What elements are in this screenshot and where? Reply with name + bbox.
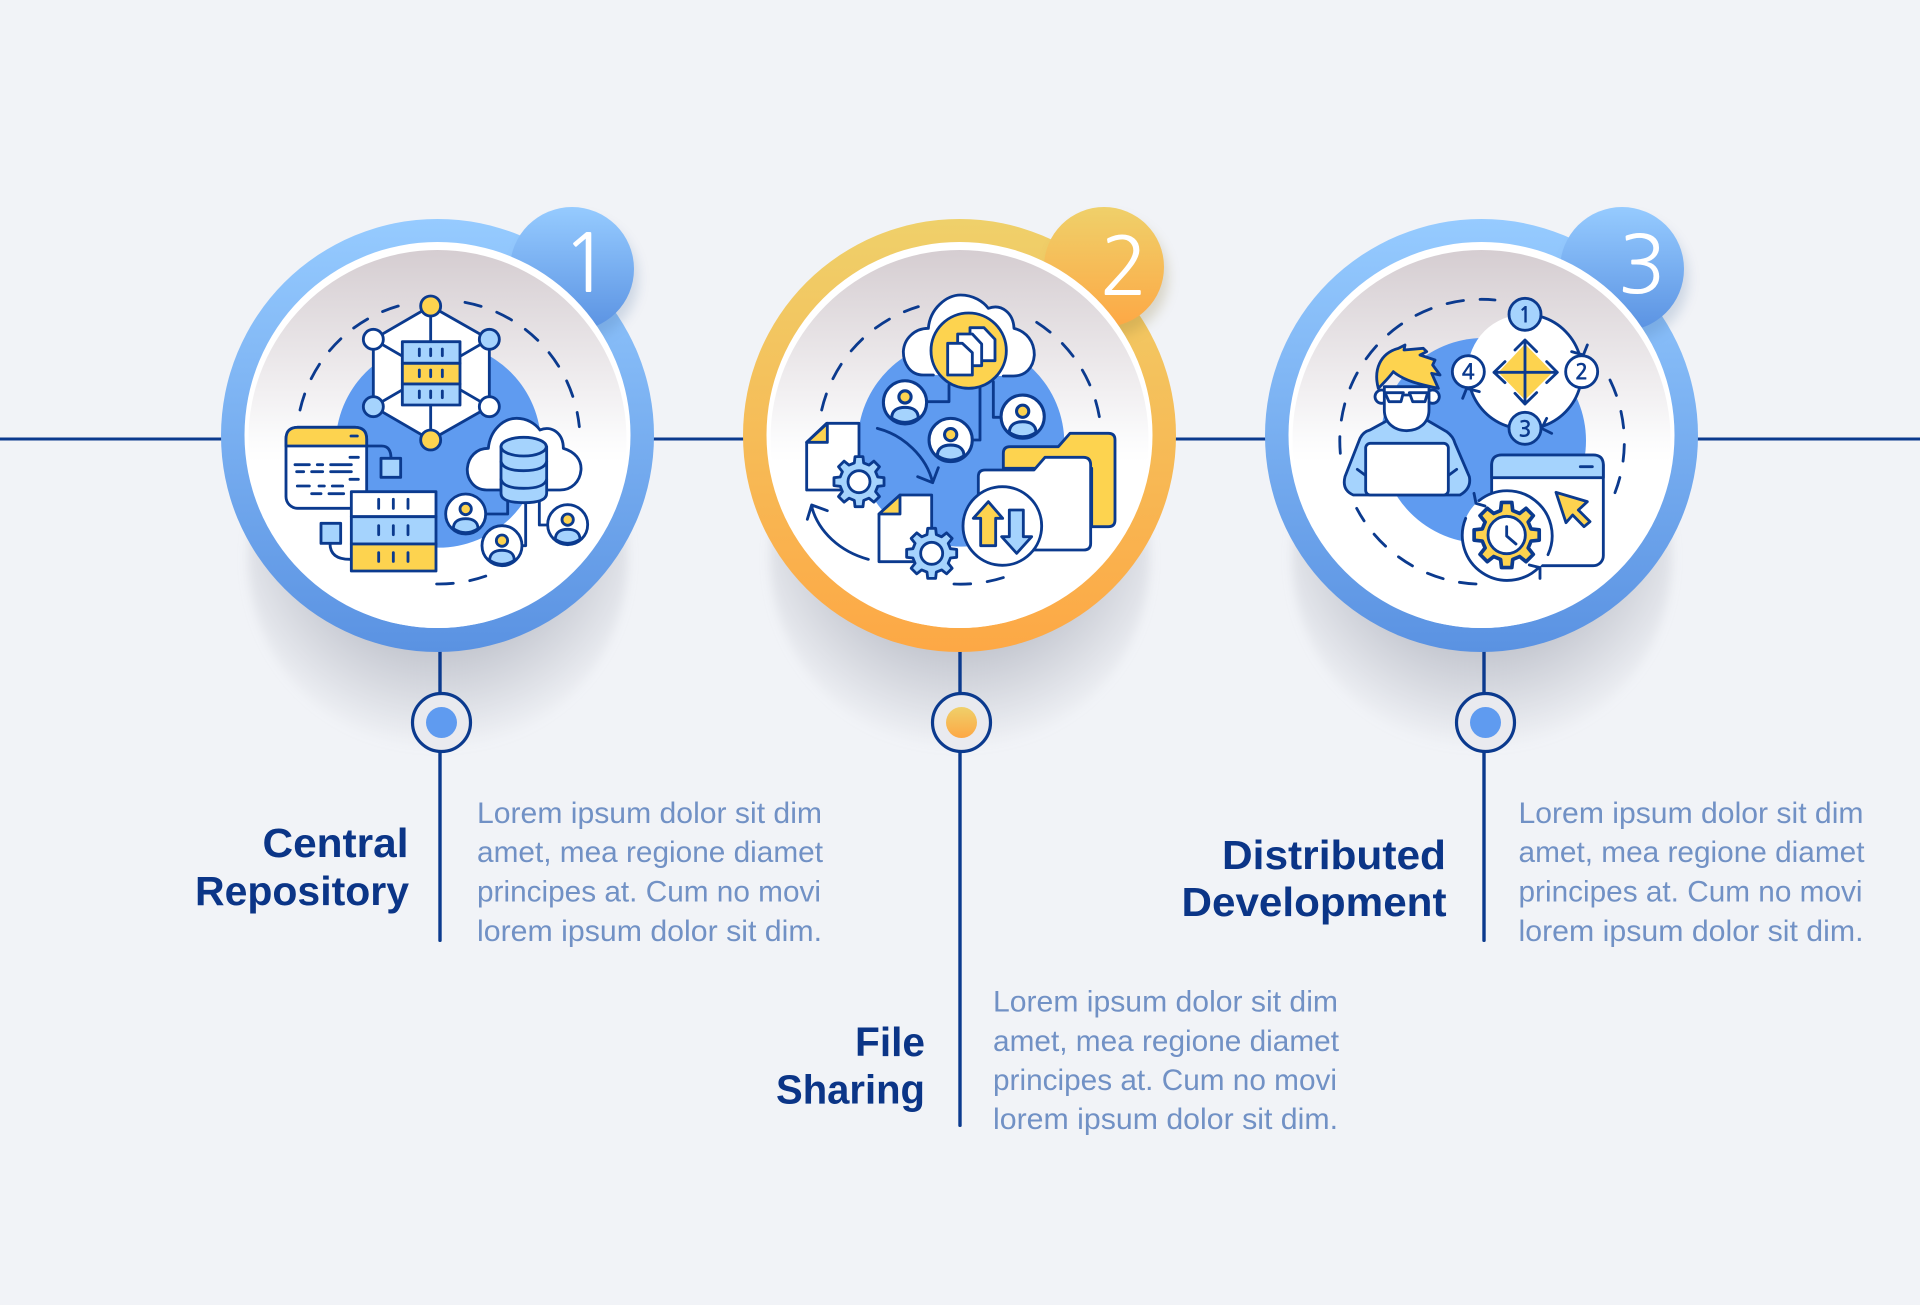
- icon: document with gear 1: [807, 423, 884, 507]
- circle shadow 1: [248, 370, 628, 750]
- heading: Central Repository: Repository: [195, 868, 409, 914]
- connector line and node 2: [932, 640, 990, 1127]
- circle shadow 3: [1292, 370, 1672, 750]
- icon: central repository: [286, 296, 588, 584]
- text block 3: amet, mea regione diamet: [1518, 836, 1865, 869]
- icon: code window: [286, 427, 401, 508]
- icon: users: [883, 381, 1044, 462]
- heading: File Sharing: File: [855, 1019, 925, 1065]
- text block 1: [477, 797, 824, 948]
- badge 1: 1: [562, 224, 610, 304]
- icon: workflow cycle: 4: [1462, 363, 1475, 384]
- badge 1: [510, 207, 638, 341]
- inner disc 3: [1288, 242, 1674, 628]
- arrow: up left: [807, 505, 868, 559]
- icon: file sharing: [807, 295, 1115, 584]
- icon: cloud database: [467, 418, 581, 546]
- arrow: down right: [877, 428, 938, 483]
- step 2: File Sharing: [743, 207, 1340, 1136]
- text block 1: amet, mea regione diamet: [477, 836, 824, 869]
- icon: workflow cycle: 3: [1518, 419, 1532, 440]
- text block 2: [993, 986, 1340, 1136]
- text block 1: lorem ipsum dolor sit dim.: [477, 915, 822, 948]
- heading: File Sharing: [776, 1019, 925, 1112]
- text block 2: lorem ipsum dolor sit dim.: [993, 1103, 1338, 1136]
- icon: workflow cycle: [1452, 298, 1598, 444]
- icon: cloud with files: [903, 295, 1034, 440]
- icon: developer with laptop: [1344, 345, 1470, 495]
- timeline: horizontal line: [0, 438, 1920, 440]
- text block 3: Lorem ipsum dolor sit dim: [1518, 797, 1864, 830]
- text block 2: Lorem ipsum dolor sit dim: [993, 986, 1338, 1018]
- text block 2: amet, mea regione diamet: [993, 1025, 1340, 1058]
- icon: gear with clock: [1462, 491, 1552, 581]
- icon: window with cursor: [1492, 455, 1603, 566]
- icon: server stack: [321, 492, 436, 571]
- text block 2: principes at. Cum no movi: [993, 1064, 1337, 1097]
- ring 1: [221, 219, 654, 652]
- text block 3: [1518, 797, 1865, 948]
- text block 1: Lorem ipsum dolor sit dim: [477, 797, 822, 830]
- icon: network hexagon: [363, 296, 499, 450]
- step 3: Distributed Development: [1182, 207, 1865, 948]
- step 1: Central Repository: [195, 207, 824, 948]
- connector line and node 1: [412, 640, 470, 942]
- heading: Distributed Development: Development: [1182, 879, 1447, 925]
- icon: workflow cycle: 1: [1518, 305, 1532, 326]
- text block 3: principes at. Cum no movi: [1518, 876, 1862, 908]
- icon: distributed development: [1340, 298, 1624, 584]
- badge 3: 3: [1618, 225, 1666, 305]
- heading: Distributed Development: Distributed: [1222, 832, 1446, 878]
- badge 2: [1044, 207, 1168, 337]
- inner disc 2: [766, 242, 1152, 628]
- heading: Central Repository: [195, 820, 409, 914]
- icon: users: [446, 494, 588, 566]
- badge 3: [1560, 207, 1688, 341]
- ring 2: [743, 219, 1176, 652]
- icon: document with gear 2: [879, 495, 957, 578]
- heading: Central Repository: Central: [262, 820, 408, 866]
- connector line and node 3: [1456, 640, 1514, 942]
- badge 2: 2: [1100, 227, 1148, 307]
- text block 1: principes at. Cum no movi: [477, 876, 821, 908]
- heading: File Sharing: Sharing: [776, 1066, 925, 1112]
- icon: folders with transfer arrows: [963, 433, 1115, 565]
- icon: workflow cycle: 2: [1575, 363, 1588, 384]
- heading: Distributed Development: [1182, 832, 1447, 925]
- inner disc 1: [244, 242, 630, 628]
- ring 3: [1265, 219, 1698, 652]
- text block 3: lorem ipsum dolor sit dim.: [1518, 915, 1864, 948]
- circle shadow 2: [770, 370, 1150, 750]
